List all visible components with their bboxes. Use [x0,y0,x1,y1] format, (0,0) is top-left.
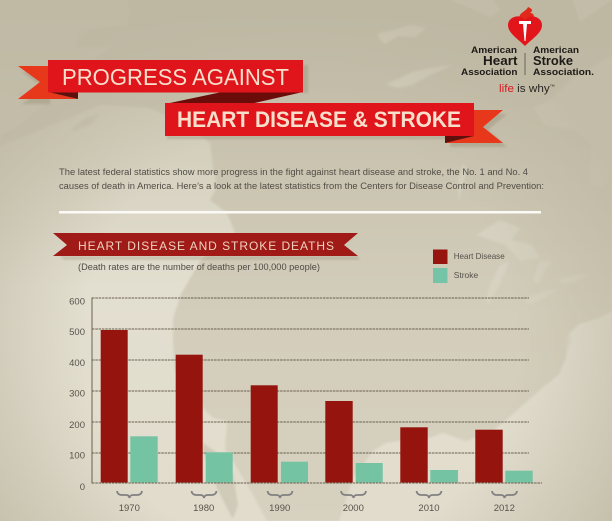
y axis labels: 400 [69,358,85,369]
ribbon tail [445,110,503,143]
logo text: American Stroke Association [533,45,594,78]
y axis labels: 200 [69,420,85,431]
title line 1: PROGRESS AGAINST [62,64,289,90]
title ribbon: Progress Against [18,60,308,104]
map: Baja peninsula [203,443,238,519]
tagline: life is why: ™ [550,84,555,90]
ribbon connector [165,92,303,104]
logo text: American Heart Association: American [471,45,517,56]
title line 2: HEART DISEASE & STROKE [177,107,461,132]
title ribbon: Heart Disease & Stroke [165,103,507,147]
logo text: American Heart Association [461,45,518,78]
grid lines [92,298,542,483]
logo text: American Stroke Association: Stroke [533,53,573,68]
intro paragraph: The latest federal statistics show more progress in the fight against heart disease and stroke, the No. 1 and No. 4 [59,167,529,178]
logo text: American Heart Association: Heart [483,53,518,68]
year labels: 2012 [494,503,515,514]
y axis labels: 0 [80,482,85,493]
section ribbon: Heart Disease and Stroke Deaths: HEART DISEASE AND STROKE DEATHS [78,239,334,253]
year labels: 2010 [418,503,440,514]
intro paragraph: causes of death in America. Here’s a look at the latest statistics from the Centers for Disease Control and Prevention: [59,181,544,192]
year labels [119,503,515,514]
legend: heart disease: Heart Disease [454,251,505,261]
intro paragraph [59,167,544,192]
icon: heart with torch [508,16,542,46]
tagline: life is why: life is why [499,83,548,95]
bar chart [69,296,542,514]
logo: American Heart / American Stroke Association [461,7,594,95]
heart disease bars [101,330,503,482]
y axis labels: 600 [69,296,85,308]
year braces [117,491,517,498]
y axis labels: 100 [69,450,85,462]
icon: flame [519,7,534,20]
chart note: (Death rates are the number of deaths per 100,000 people) [78,262,320,272]
map: Aleutian island [70,113,100,131]
map: eastern light area [533,55,612,187]
year labels: 2000 [343,503,364,514]
logo text: American Stroke Association: Association. [533,67,594,78]
year labels: 1980 [193,503,214,514]
ribbon tail [18,66,78,99]
map: northern waters [378,0,612,355]
year labels: 1970 [119,503,140,514]
legend: stroke: Stroke [454,270,478,280]
logo text: American Heart Association: Association [461,67,518,78]
section ribbon: Heart Disease and Stroke Deaths [53,233,360,260]
legend [433,250,505,283]
stroke bars [130,436,533,482]
logo text: American Stroke Association: American [533,45,579,56]
y axis labels: 500 [69,327,85,338]
y axis labels: 300 [69,388,85,400]
year labels: 1990 [269,503,290,514]
y axis labels [69,296,85,493]
